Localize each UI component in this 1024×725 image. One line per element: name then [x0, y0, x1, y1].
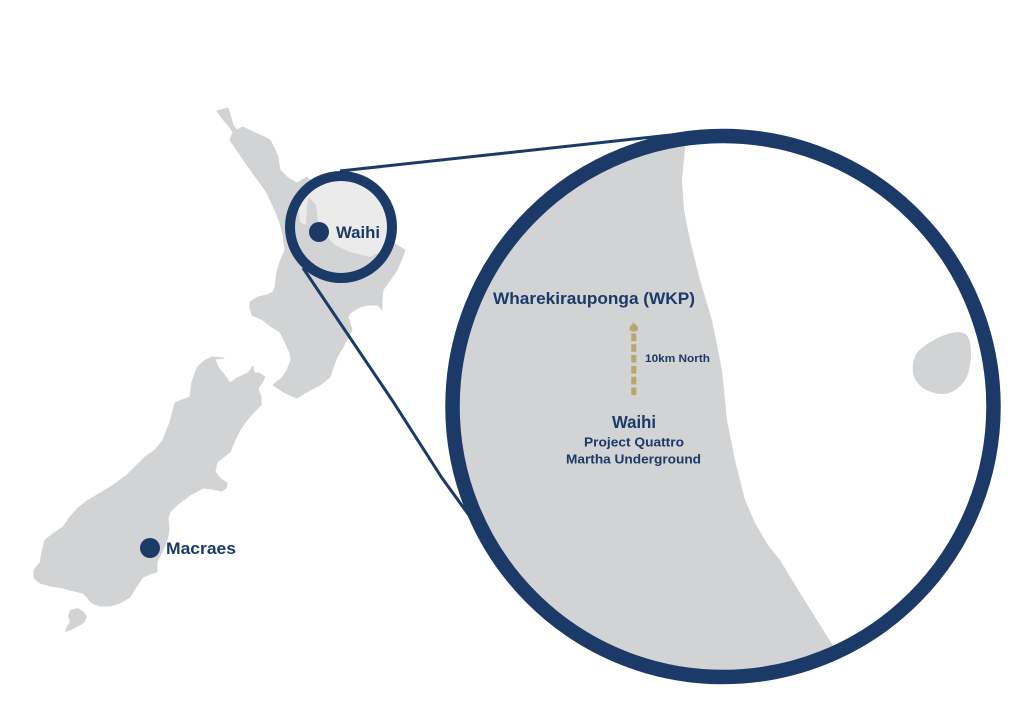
marker: Macraes: Macraes — [166, 539, 236, 558]
connector line: small circle to big circle, top — [340, 134, 680, 171]
label: Martha Underground: Martha Underground — [566, 452, 701, 466]
label: Project Quattro: Project Quattro — [584, 436, 684, 450]
label: Waihi: Waihi — [612, 412, 656, 432]
infographic: New Zealand map with zoomed Waihi inset — [34, 108, 1001, 684]
label: 10km North: 10km North — [645, 353, 710, 365]
label: Wharekirauponga (WKP): Wharekirauponga (WKP) — [493, 290, 695, 308]
magnified panel: Waihi region — [440, 120, 994, 690]
magnified offshore island — [913, 332, 971, 394]
connector line: small circle to big circle, bottom — [303, 268, 471, 518]
map: North Island — [217, 108, 405, 398]
map: Stewart Island — [65, 608, 87, 632]
marker: Waihi — [309, 222, 380, 242]
marker: Waihi: Waihi — [336, 223, 380, 242]
magnified land — [460, 146, 832, 670]
dashed arrow: 10km north — [630, 322, 638, 395]
map: South Island — [34, 357, 265, 606]
zoom circle: Waihi locator — [285, 171, 397, 283]
marker: Macraes — [140, 538, 236, 558]
land inside locator circle — [295, 197, 379, 273]
